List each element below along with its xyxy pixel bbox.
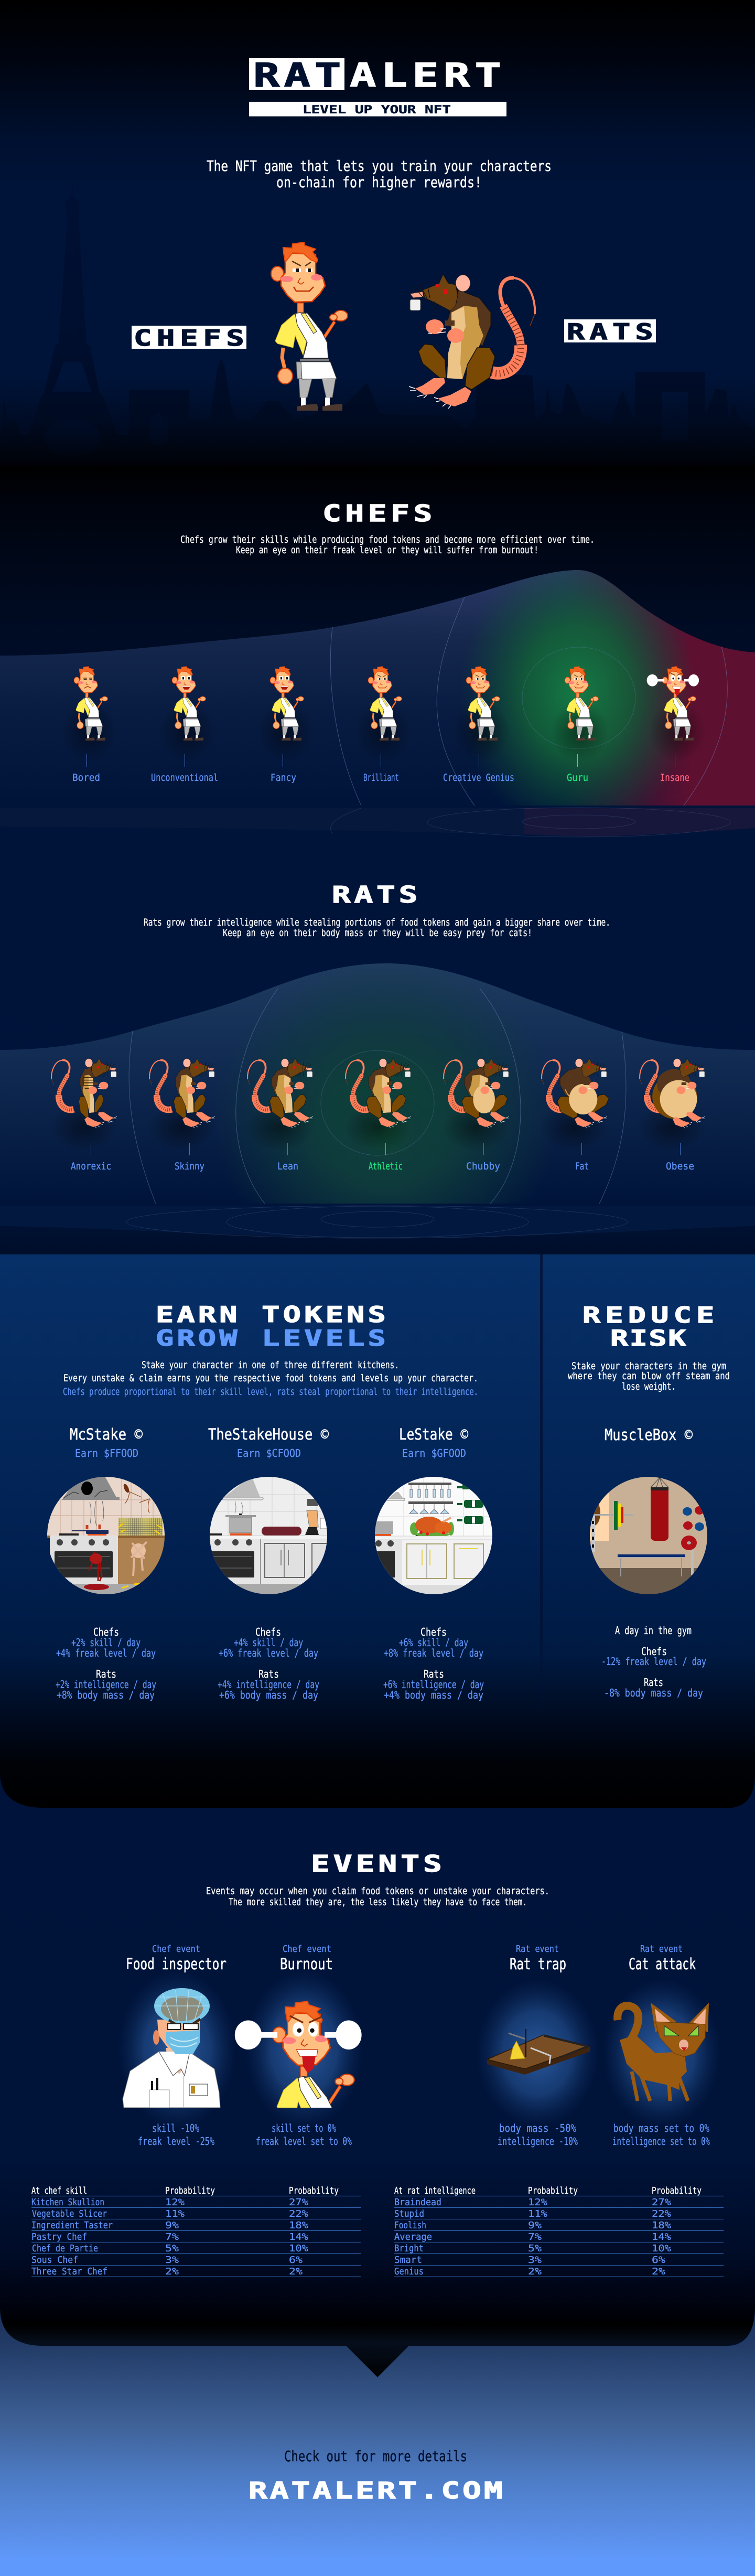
illustration: dirty kitchen bbox=[47, 1476, 165, 1596]
table: rat intelligence probability: 10% bbox=[652, 2243, 671, 2254]
chef stats bbox=[219, 1626, 318, 1659]
rat level: athletic bbox=[344, 1058, 412, 1172]
effects: skill set to 0% bbox=[272, 2122, 336, 2134]
table: rat intelligence probability: Average bbox=[394, 2231, 432, 2242]
table: rat intelligence probability: Smart bbox=[394, 2255, 422, 2266]
chef stats: Chefs bbox=[420, 1626, 447, 1638]
skyline silhouette bbox=[0, 173, 755, 466]
table: chef skill probability: Kitchen Skullion bbox=[31, 2197, 104, 2208]
earn description: Stake your character in one of three different kitchens. bbox=[142, 1359, 399, 1371]
chef level: bored bbox=[60, 667, 118, 783]
rat stats: +2% intelligence / day bbox=[56, 1678, 156, 1691]
chef level: creative genius: Creative Genius bbox=[443, 772, 514, 783]
table: rat intelligence probability: Bright bbox=[394, 2243, 424, 2254]
table: rat intelligence probability: 2% bbox=[652, 2266, 665, 2277]
chef stats: +6% skill / day bbox=[399, 1636, 468, 1649]
table: rat intelligence probability: 5% bbox=[528, 2243, 542, 2254]
reduce risk description bbox=[568, 1360, 730, 1392]
illustration: gym bbox=[588, 1477, 707, 1596]
chefs description bbox=[180, 534, 595, 556]
panel: chefs bbox=[0, 466, 755, 839]
chef stats: Chefs bbox=[255, 1626, 281, 1638]
event: food inspector bbox=[117, 1944, 238, 2148]
table: rat intelligence probability: Genius bbox=[394, 2266, 424, 2277]
rat level: lean: Lean bbox=[277, 1161, 298, 1172]
chef level: guru bbox=[551, 667, 609, 783]
table: chef skill probability: 9% bbox=[165, 2220, 179, 2231]
table: chef skill probability: Probability bbox=[289, 2185, 339, 2196]
rat stats bbox=[383, 1668, 484, 1701]
kitchen: lestake: Earn $GFOOD bbox=[402, 1447, 466, 1459]
kitchen: the stake house: TheStakeHouse © bbox=[208, 1425, 329, 1443]
logo: RAT bbox=[253, 57, 341, 94]
chef level: fancy: Fancy bbox=[271, 772, 296, 783]
table: chef skill probability: 11% bbox=[165, 2208, 185, 2219]
rat level: fat bbox=[540, 1058, 609, 1172]
rat stats: Rats bbox=[96, 1668, 116, 1680]
rat level: chubby bbox=[442, 1058, 510, 1172]
intro text bbox=[207, 157, 552, 191]
earn tokens heading: GROW LEVELS bbox=[156, 1325, 386, 1351]
kitchen: mcstake: McStake © bbox=[70, 1425, 143, 1443]
event: burnout: Chef event bbox=[283, 1944, 331, 1955]
chef stats: +4% freak level / day bbox=[56, 1647, 156, 1659]
reduce risk heading bbox=[583, 1302, 714, 1351]
rat stats: Rats bbox=[258, 1668, 279, 1680]
table: chef skill probability: Ingredient Taster bbox=[31, 2220, 113, 2231]
table: chef skill probability: Probability bbox=[165, 2185, 215, 2196]
earn tokens heading bbox=[156, 1302, 386, 1351]
chef stats: +8% freak level / day bbox=[384, 1647, 483, 1659]
table: chef skill probability bbox=[31, 2185, 361, 2277]
table: rat intelligence probability: 18% bbox=[652, 2220, 671, 2231]
reduce risk column bbox=[568, 1302, 730, 1699]
skill curve chart bbox=[0, 545, 755, 839]
table: rat intelligence probability: At rat intelligence bbox=[394, 2185, 476, 2196]
rat stats: +6% body mass / day bbox=[219, 1689, 318, 1701]
table: chef skill probability: 7% bbox=[165, 2231, 179, 2242]
effects: freak level set to 0% bbox=[256, 2135, 352, 2148]
chef stats: +6% freak level / day bbox=[219, 1647, 318, 1659]
table: rat intelligence probability: 2% bbox=[528, 2266, 542, 2277]
earn description: Chefs produce proportional to their skill level, rats steal proportional to their intelligence. bbox=[63, 1386, 478, 1398]
table: chef skill probability: At chef skill bbox=[31, 2185, 87, 2196]
intro text: on-chain for higher rewards! bbox=[276, 174, 482, 191]
table: chef skill probability: 14% bbox=[289, 2231, 308, 2242]
table: chef skill probability: 2% bbox=[289, 2266, 303, 2277]
panel: events background bbox=[0, 1773, 755, 2377]
gym stats: -12% freak level / day bbox=[601, 1655, 706, 1668]
rat level: skinny: Skinny bbox=[175, 1161, 204, 1172]
table: chef skill probability: 18% bbox=[289, 2220, 308, 2231]
label: rats: RATS bbox=[567, 319, 653, 345]
rat level: fat: Fat bbox=[575, 1161, 589, 1172]
reduce risk description: lose weight. bbox=[622, 1381, 676, 1392]
table: chef skill probability: 3% bbox=[165, 2255, 179, 2266]
reduce risk heading: REDUCE bbox=[583, 1302, 714, 1328]
table: chef skill probability: 10% bbox=[289, 2243, 308, 2254]
table: rat intelligence probability: 11% bbox=[528, 2208, 547, 2219]
rat level: anorexic bbox=[50, 1058, 118, 1172]
panel: hero bbox=[0, 0, 755, 467]
event: cat attack: Cat attack bbox=[629, 1955, 696, 1973]
kitchen: lestake: LeStake © bbox=[399, 1425, 468, 1443]
gym stats: Rats bbox=[644, 1676, 663, 1689]
rat stats: +4% body mass / day bbox=[384, 1689, 483, 1701]
table: chef skill probability: 2% bbox=[165, 2266, 179, 2277]
chef level: brilliant bbox=[354, 667, 412, 783]
chef stats: Chefs bbox=[93, 1626, 119, 1638]
table: rat intelligence probability: Probability bbox=[652, 2185, 702, 2196]
table: rat intelligence probability: Stupid bbox=[394, 2208, 424, 2219]
rats description: Rats grow their intelligence while stealing portions of food tokens and gain a bigger share over time. bbox=[144, 917, 610, 928]
event: food inspector: Food inspector bbox=[126, 1955, 226, 1973]
table: rat intelligence probability: 9% bbox=[528, 2220, 542, 2231]
table: rat intelligence probability: 27% bbox=[652, 2197, 671, 2208]
effects bbox=[612, 2122, 710, 2148]
table: rat intelligence probability: 22% bbox=[652, 2208, 671, 2219]
reduce risk heading: RISK bbox=[610, 1325, 686, 1351]
panel: rats bbox=[0, 885, 755, 1254]
effects: body mass set to 0% bbox=[613, 2122, 709, 2134]
tagline bar bbox=[249, 102, 506, 116]
hero rat bbox=[409, 274, 535, 409]
illustration: burnout chef bbox=[235, 2001, 362, 2108]
logo: ALERT bbox=[350, 57, 501, 94]
table: rat intelligence probability: 6% bbox=[652, 2255, 665, 2266]
rat stats bbox=[56, 1668, 156, 1701]
rat level: athletic: Athletic bbox=[369, 1161, 403, 1172]
event: rat trap: Rat event bbox=[516, 1944, 559, 1955]
table: chef skill probability: 12% bbox=[165, 2197, 185, 2208]
chef level: unconventional bbox=[151, 667, 218, 783]
table: chef skill probability: Sous Chef bbox=[31, 2255, 78, 2266]
chef level: unconventional: Unconventional bbox=[151, 772, 218, 783]
rat level: obese bbox=[638, 1058, 706, 1172]
chef level: insane bbox=[647, 667, 706, 783]
rat level: lean bbox=[246, 1058, 314, 1172]
table: chef skill probability: Pastry Chef bbox=[31, 2231, 87, 2242]
events description: Events may occur when you claim food tokens or unstake your characters. bbox=[206, 1885, 549, 1897]
rats description: Keep an eye on their body mass or they will be easy prey for cats! bbox=[223, 927, 532, 939]
chefs description: Chefs grow their skills while producing food tokens and become more efficient over time. bbox=[180, 534, 595, 545]
panel: footer bbox=[0, 2306, 755, 2576]
table: rat intelligence probability: 12% bbox=[528, 2197, 547, 2208]
table: chef skill probability: Chef de Partie bbox=[32, 2243, 98, 2254]
rat stats: Rats bbox=[424, 1668, 444, 1680]
kitchen: mcstake: Earn $FFOOD bbox=[75, 1447, 138, 1459]
panel: events bbox=[31, 1851, 724, 2277]
rat stats: +4% intelligence / day bbox=[218, 1678, 319, 1691]
chef level: brilliant: Brilliant bbox=[363, 772, 399, 783]
rats description bbox=[144, 917, 610, 939]
event: rat trap: Rat trap bbox=[510, 1955, 566, 1973]
chef stats: +4% skill / day bbox=[234, 1636, 303, 1649]
events description: The more skilled they are, the less likely they have to face them. bbox=[229, 1896, 527, 1908]
table: chef skill probability: 6% bbox=[289, 2255, 303, 2266]
rat stats: +6% intelligence / day bbox=[383, 1678, 484, 1691]
table: rat intelligence probability: 7% bbox=[528, 2231, 542, 2242]
event: cat attack: Rat event bbox=[640, 1944, 683, 1955]
table: rat intelligence probability: Braindead bbox=[394, 2197, 441, 2208]
chefs description: Keep an eye on their freak level or they will suffer from burnout! bbox=[236, 544, 538, 556]
events description bbox=[206, 1885, 549, 1908]
chef level: bored: Bored bbox=[72, 772, 100, 783]
table: rat intelligence probability bbox=[394, 2185, 724, 2277]
event: burnout: Burnout bbox=[280, 1955, 333, 1973]
rat level: anorexic: Anorexic bbox=[71, 1161, 111, 1172]
event: burnout bbox=[235, 1945, 362, 2145]
chef stats bbox=[56, 1626, 156, 1659]
kitchen: the stake house bbox=[208, 1425, 333, 1701]
table: chef skill probability: Vegetable Slicer bbox=[32, 2208, 107, 2219]
effects: freak level -25% bbox=[138, 2135, 214, 2148]
label: chefs: CHEFS bbox=[134, 325, 244, 351]
gym stats: Chefs bbox=[641, 1645, 667, 1658]
kitchen: the stake house: Earn $CFOOD bbox=[237, 1447, 301, 1459]
chef level: creative genius bbox=[443, 667, 514, 783]
effects: intelligence -10% bbox=[498, 2135, 578, 2148]
earn description bbox=[63, 1359, 478, 1398]
body mass curve chart bbox=[0, 963, 755, 1239]
gym name: MuscleBox © bbox=[605, 1426, 693, 1444]
rat level: obese: Obese bbox=[666, 1161, 694, 1172]
earn description: Every unstake & claim earns you the respective food tokens and levels up your character. bbox=[63, 1372, 478, 1384]
gym stats bbox=[601, 1624, 706, 1699]
website: RATALERT.COM bbox=[249, 2477, 503, 2504]
effects: skill -10% bbox=[152, 2122, 199, 2134]
rat stats bbox=[218, 1668, 319, 1701]
event: food inspector: Chef event bbox=[152, 1944, 200, 1955]
table: rat intelligence probability: 3% bbox=[528, 2255, 542, 2266]
chef stats bbox=[384, 1626, 483, 1659]
tagline bar: LEVEL UP YOUR NFT bbox=[303, 103, 451, 116]
rat level: chubby: Chubby bbox=[466, 1161, 500, 1172]
effects: intelligence set to 0% bbox=[612, 2135, 710, 2148]
table: rat intelligence probability: 14% bbox=[652, 2231, 671, 2242]
hero chef bbox=[271, 242, 348, 411]
panel: earn tokens and reduce risk bbox=[0, 1254, 755, 1808]
illustration: inspector bbox=[123, 1988, 220, 2108]
table: chef skill probability: Three Star Chef bbox=[31, 2266, 107, 2277]
table: chef skill probability: 22% bbox=[289, 2208, 308, 2219]
rat level: skinny bbox=[148, 1058, 216, 1172]
chef stats: +2% skill / day bbox=[71, 1636, 141, 1649]
effects: body mass -50% bbox=[499, 2122, 576, 2134]
effects bbox=[256, 2122, 352, 2148]
chefs heading: CHEFS bbox=[322, 500, 432, 527]
events heading: EVENTS bbox=[311, 1851, 442, 1877]
chef level: fancy bbox=[256, 667, 314, 783]
chef level: guru: Guru bbox=[567, 772, 588, 783]
gym stats: A day in the gym bbox=[615, 1624, 692, 1637]
table: rat intelligence probability: Foolish bbox=[394, 2220, 426, 2231]
logo bbox=[249, 57, 501, 94]
event: cat attack bbox=[601, 1944, 722, 2148]
kitchen: mcstake bbox=[47, 1425, 165, 1701]
table: chef skill probability: 5% bbox=[165, 2243, 179, 2254]
gym stats: -8% body mass / day bbox=[604, 1687, 703, 1699]
effects bbox=[498, 2122, 578, 2148]
illustration: cat bbox=[618, 2003, 709, 2101]
call to action: Check out for more details bbox=[284, 2448, 467, 2465]
earn tokens heading: EARN TOKENS bbox=[156, 1302, 386, 1327]
rats heading: RATS bbox=[332, 882, 417, 908]
intro text: The NFT game that lets you train your characters bbox=[207, 157, 552, 175]
illustration: clean kitchen bbox=[208, 1477, 333, 1596]
kitchen: lestake bbox=[374, 1425, 493, 1701]
event: rat trap bbox=[474, 1944, 600, 2148]
illustration: fancy kitchen bbox=[374, 1477, 493, 1596]
effects bbox=[138, 2122, 214, 2148]
table: rat intelligence probability: Probability bbox=[528, 2185, 578, 2196]
rat stats: +8% body mass / day bbox=[57, 1689, 155, 1701]
illustration: mouse trap bbox=[487, 2029, 590, 2075]
table: chef skill probability: 27% bbox=[289, 2197, 308, 2208]
chef level: insane: Insane bbox=[660, 772, 689, 783]
